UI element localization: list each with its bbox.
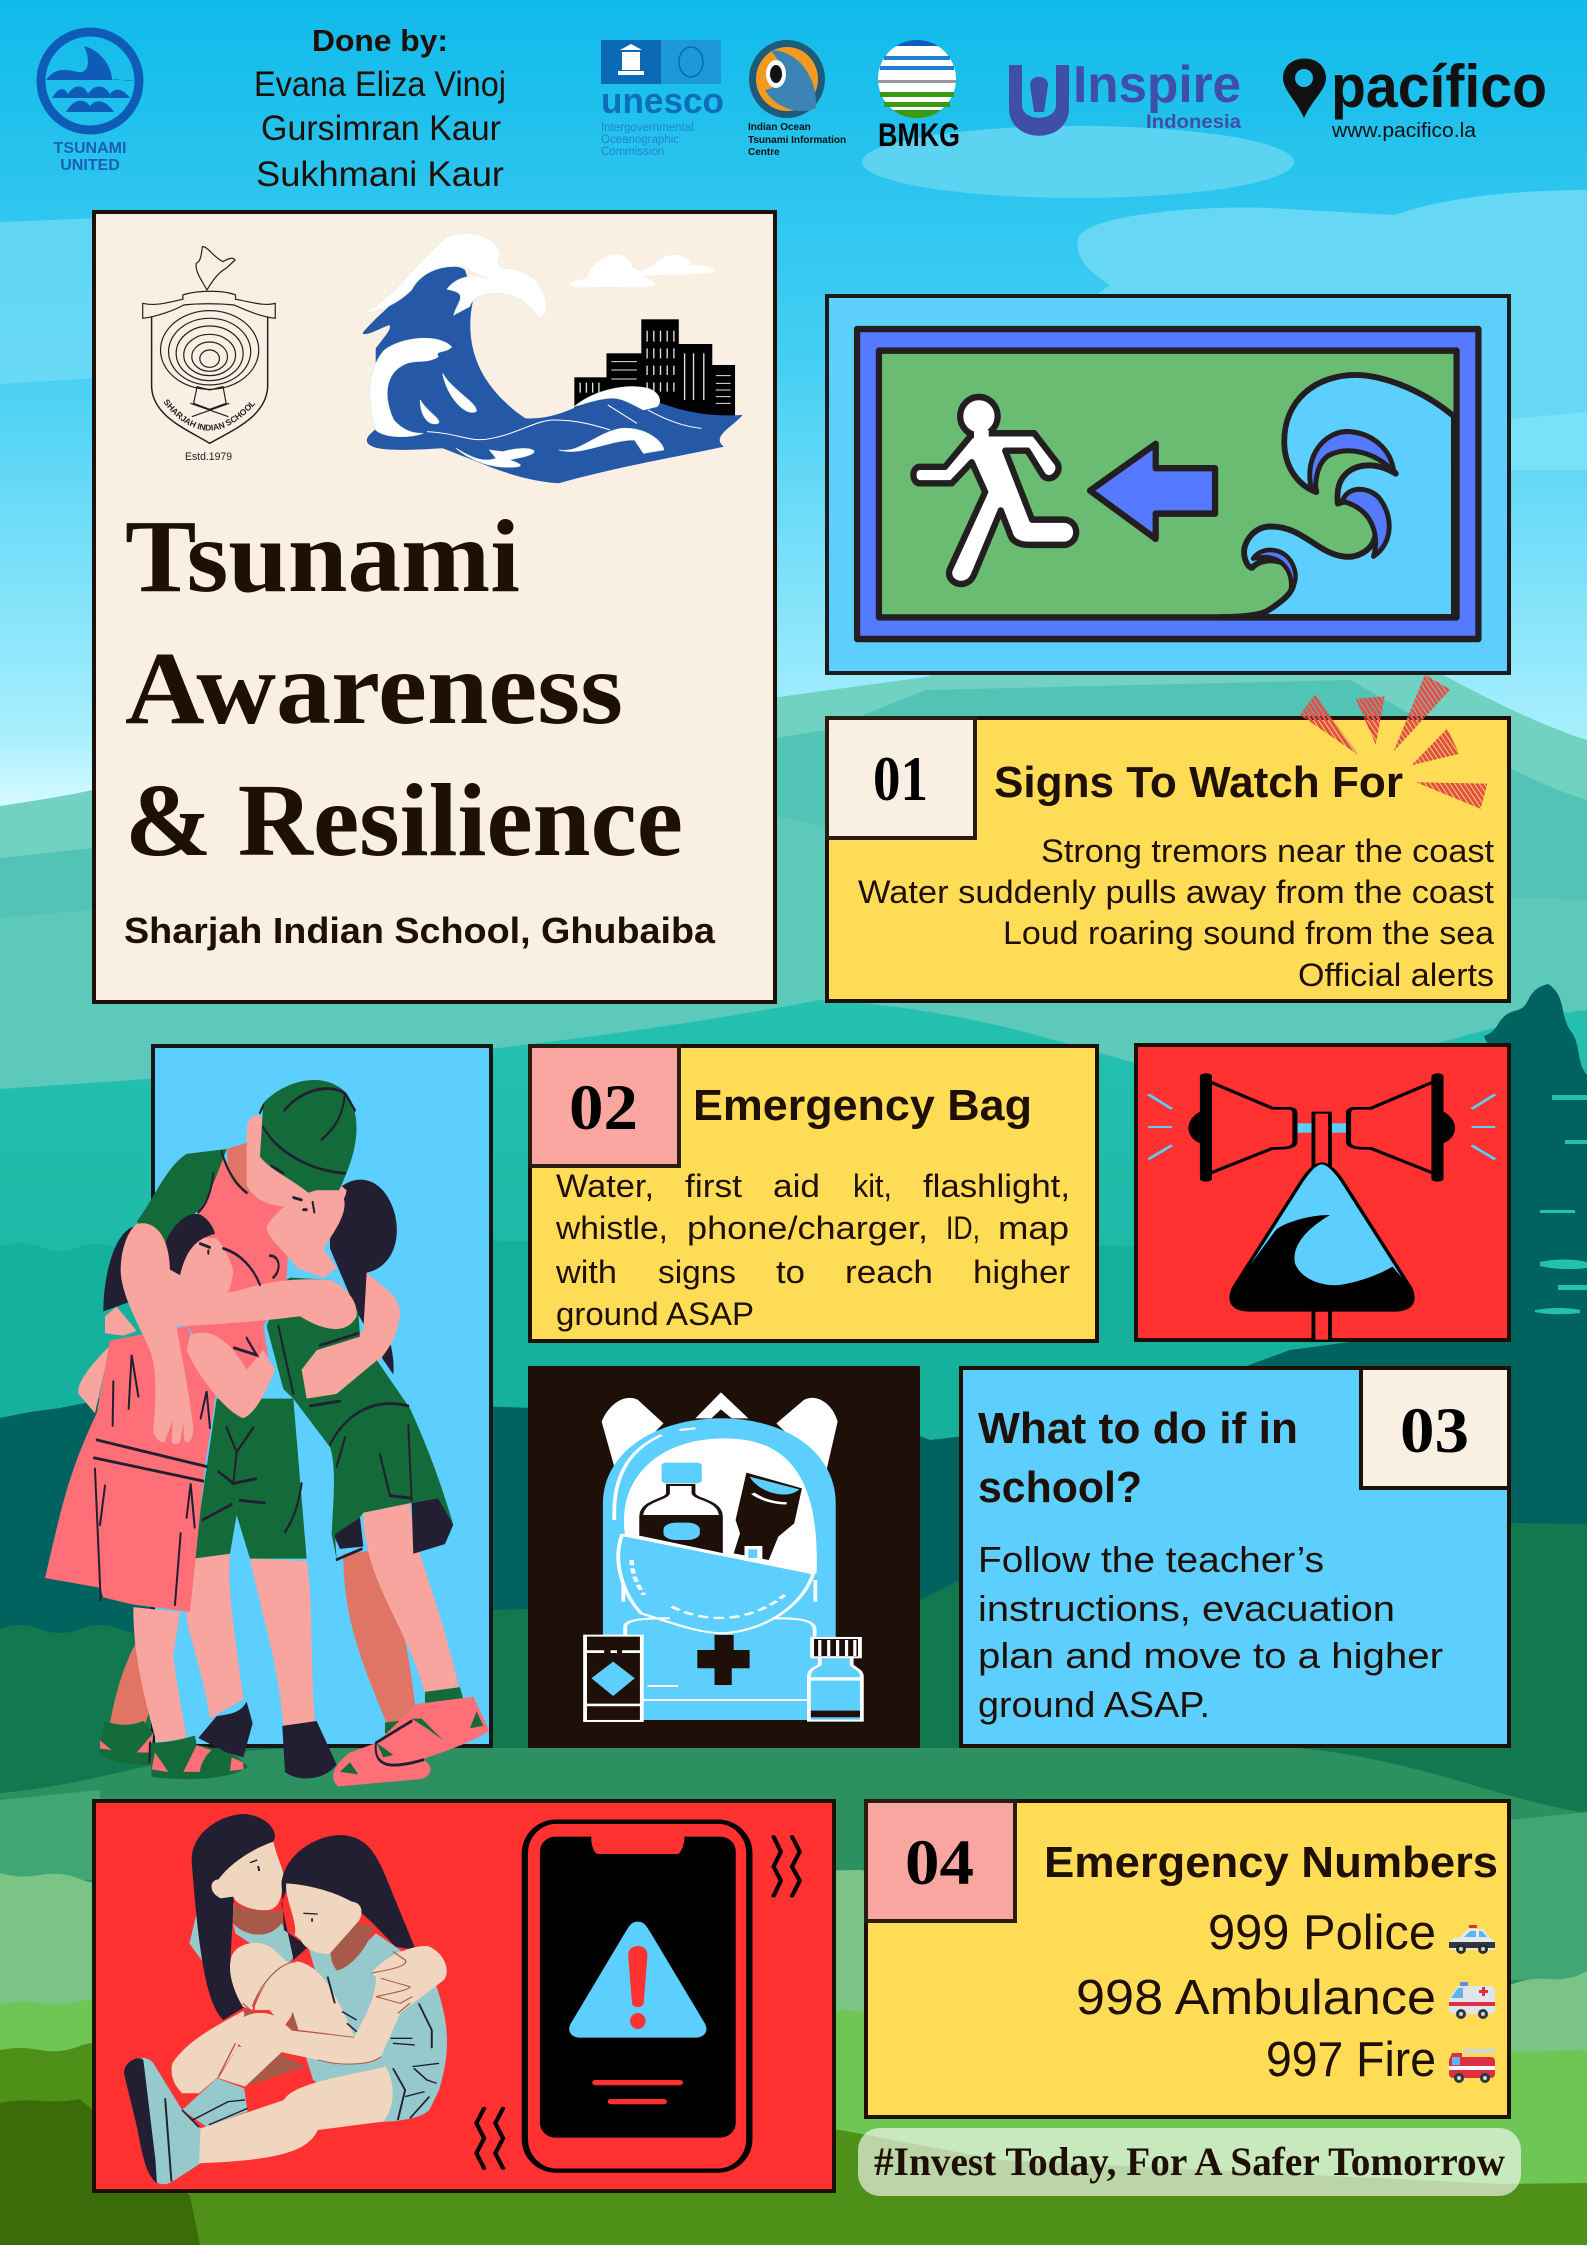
text block: bag contents: Water, bbox=[556, 1168, 654, 1204]
text block: numbers: 997 Fire bbox=[1266, 2033, 1436, 2087]
logo: Tsunami United: TSUNAMI bbox=[54, 140, 126, 157]
number box 04 bbox=[866, 1801, 1015, 1921]
text block: school instructions: ground ASAP. bbox=[978, 1684, 1210, 1725]
panel: 01 signs to watch for bbox=[827, 675, 1509, 1001]
credits: done by: Evana Eliza Vinoj bbox=[254, 65, 506, 104]
logo: Indian Ocean Tsunami Information Centre: Tsunami Information bbox=[748, 135, 846, 146]
logo: UNESCO: Commission bbox=[601, 146, 664, 158]
logo: Inspire Indonesia: Indonesia bbox=[1146, 112, 1241, 133]
panel: siren bbox=[1136, 1045, 1509, 1341]
text block: signs: Official alerts bbox=[1298, 957, 1494, 993]
text block: bag contents bbox=[555, 1168, 1070, 1332]
text block: bag contents: with bbox=[555, 1254, 617, 1290]
icon: right horn bbox=[1349, 1073, 1455, 1182]
logo: BMKG bbox=[878, 40, 960, 153]
panel: family illustration bbox=[45, 1046, 491, 1786]
number box 02 bbox=[530, 1046, 679, 1166]
text block: numbers: 998 Ambulance bbox=[1076, 1971, 1436, 2025]
panel: emergency backpack bbox=[528, 1366, 920, 1748]
sandals and shoes bbox=[98, 1687, 489, 1786]
logo: Indian Ocean Tsunami Information Centre bbox=[748, 40, 846, 158]
logo: Tsunami United bbox=[41, 32, 139, 174]
arrow bbox=[1090, 444, 1215, 539]
text block: signs bbox=[858, 833, 1494, 993]
text block: bag contents: phone/charger, bbox=[687, 1210, 928, 1246]
icon: ambulance bbox=[1449, 1982, 1495, 2019]
green outfits bbox=[193, 1399, 307, 1559]
panel: 04 emergency numbers bbox=[866, 1801, 1509, 2117]
panel: title bbox=[92, 210, 777, 1004]
logo: Indian Ocean Tsunami Information Centre: Centre bbox=[748, 147, 780, 158]
text block: school instructions: instructions, evacuation bbox=[978, 1588, 1395, 1629]
text block: numbers bbox=[1076, 1906, 1436, 2087]
number box 04: 04 bbox=[905, 1827, 974, 1899]
credits: done by bbox=[254, 23, 506, 194]
text block: signs: Water suddenly pulls away from the coast bbox=[858, 874, 1494, 910]
text block: bag contents: aid bbox=[773, 1168, 820, 1204]
credits: done by: Sukhmani Kaur bbox=[256, 155, 504, 194]
icon: school crest: Estd.1979 bbox=[185, 451, 232, 463]
logo: BMKG: BMKG bbox=[878, 117, 960, 153]
drawn lines bbox=[94, 1089, 423, 1765]
logo: UNESCO bbox=[601, 40, 724, 158]
panel: girls and phone alert bbox=[94, 1801, 834, 2191]
panel: 02 emergency bag bbox=[530, 1046, 1097, 1341]
number box 01 bbox=[827, 718, 975, 838]
text block: signs: Loud roaring sound from the sea bbox=[1003, 915, 1494, 951]
logo: Inspire Indonesia bbox=[1009, 56, 1241, 136]
text block: bag contents: flashlight, bbox=[923, 1168, 1070, 1204]
text block: bag contents: reach bbox=[845, 1254, 933, 1290]
logo: Tsunami United: UNITED bbox=[60, 157, 120, 174]
text block: signs: Strong tremors near the coast bbox=[1041, 833, 1494, 869]
slogan pill bbox=[858, 2128, 1521, 2196]
icon: pocket bbox=[618, 1535, 813, 1633]
icon: tsunami wave and city bbox=[362, 233, 743, 483]
text block: bag contents: ID, bbox=[946, 1210, 980, 1246]
icon: school crest: SHARJAH INDIAN SCHOOL bbox=[164, 400, 256, 430]
logo: pacifico bbox=[1283, 53, 1547, 142]
number box 03 bbox=[1361, 1368, 1509, 1488]
icon: water bottle bbox=[641, 1463, 721, 1552]
number box 03: 03 bbox=[1400, 1395, 1469, 1467]
text block: school instructions bbox=[978, 1539, 1443, 1725]
title: Tsunami Awareness & Resilience bbox=[125, 499, 683, 878]
icon: pill bottle bbox=[809, 1638, 862, 1721]
number box 01: 01 bbox=[873, 743, 928, 814]
child bbox=[103, 1227, 163, 1311]
text block: bag contents: first bbox=[685, 1168, 742, 1204]
icon: box bbox=[585, 1636, 642, 1721]
text block: numbers: 999 Police bbox=[1208, 1906, 1436, 1960]
text block: bag contents: signs bbox=[658, 1254, 736, 1290]
logo: pacifico: www.pacifico.la bbox=[1331, 120, 1477, 142]
credits: done by: Done by: bbox=[312, 23, 448, 58]
icon: vibration marks bbox=[476, 1837, 800, 2168]
panel: 03 what to do in school bbox=[961, 1368, 1509, 1746]
icon: fire engine bbox=[1449, 2049, 1495, 2083]
icon: warning triangle with wave bbox=[1231, 1163, 1413, 1311]
icon: alert burst bbox=[1300, 675, 1487, 809]
logo: UNESCO: Intergovernmental bbox=[601, 122, 694, 134]
text block: bag contents: higher bbox=[973, 1254, 1070, 1290]
logo: pacifico: pacífico bbox=[1331, 53, 1547, 120]
slogan pill: #Invest Today, For A Safer Tomorrow bbox=[874, 2139, 1505, 2184]
text block: bag contents: ground ASAP bbox=[556, 1296, 754, 1332]
heading: school? bbox=[978, 1463, 1142, 1512]
text block: school instructions: plan and move to a higher bbox=[978, 1635, 1443, 1676]
heading bbox=[978, 1404, 1298, 1512]
icon: wave on sign bbox=[1222, 375, 1454, 617]
logo: Indian Ocean Tsunami Information Centre: Indian Ocean bbox=[748, 122, 811, 133]
logo: UNESCO: Oceanographic bbox=[601, 134, 679, 146]
number box 02: 02 bbox=[569, 1072, 638, 1144]
heading: Emergency Numbers bbox=[1044, 1838, 1498, 1887]
title: Tsunami Awareness & Resilience: Awareness bbox=[125, 631, 623, 746]
title: Tsunami Awareness & Resilience: Tsunami bbox=[125, 499, 520, 614]
icon: police car bbox=[1449, 1925, 1495, 1954]
icon: left horn bbox=[1188, 1073, 1295, 1182]
text block: bag contents: to bbox=[776, 1254, 805, 1290]
boy torso bbox=[167, 1156, 290, 1370]
icon: school crest bbox=[142, 246, 276, 463]
text block: school instructions: Follow the teacher’s bbox=[978, 1539, 1324, 1580]
heading: Emergency Bag bbox=[693, 1081, 1032, 1130]
text block: bag contents: map bbox=[998, 1210, 1069, 1246]
panel: evacuation sign bbox=[827, 296, 1509, 673]
icon: running person bbox=[913, 397, 1076, 584]
heading: What to do if in bbox=[978, 1404, 1298, 1453]
heading: Signs To Watch For bbox=[994, 758, 1403, 807]
text block: bag contents: kit, bbox=[853, 1168, 892, 1204]
tree bbox=[1484, 984, 1587, 1340]
credits: done by: Gursimran Kaur bbox=[261, 109, 501, 148]
icon: phone with warning bbox=[525, 1822, 749, 2171]
logo: UNESCO: unesco bbox=[601, 80, 724, 121]
text block: bag contents: whistle, bbox=[555, 1210, 668, 1246]
illustration: two girls bbox=[124, 1814, 447, 2184]
title: Tsunami Awareness & Resilience: & Resilience bbox=[125, 763, 683, 878]
subtitle: school name: Sharjah Indian School, Ghubaiba bbox=[124, 910, 716, 951]
icon: flashlight bbox=[734, 1473, 802, 1560]
logo: Inspire Indonesia: Inspire bbox=[1073, 56, 1241, 114]
